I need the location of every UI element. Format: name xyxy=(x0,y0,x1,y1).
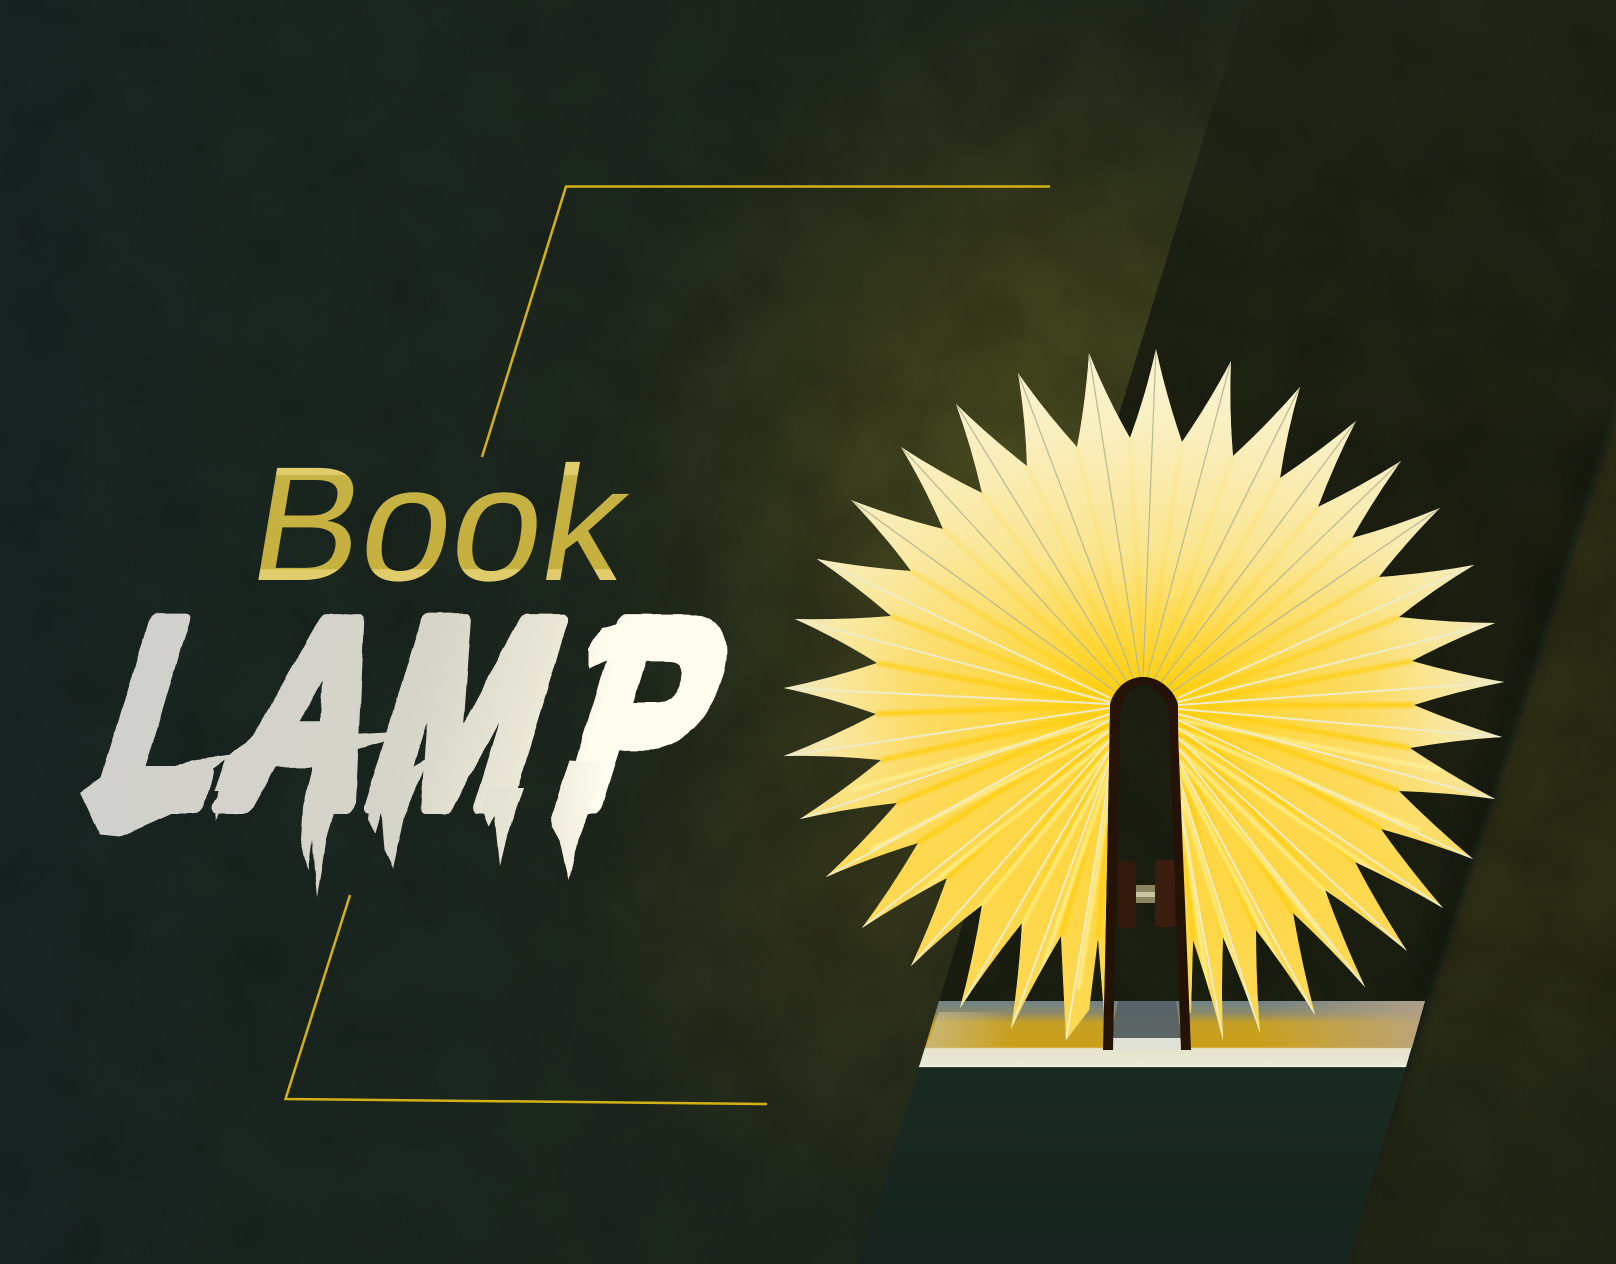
product: fanned paper pages of the lamp xyxy=(770,340,1520,1050)
tip fold lines, side and lower xyxy=(784,559,1504,1040)
centre-of-page highlights, lower half xyxy=(850,720,1440,990)
product: shelf with pool of light xyxy=(919,1001,1425,1067)
panel: olive diagonal wedge bottom right xyxy=(1320,420,1616,1264)
panel: dark diagonal band behind lamp xyxy=(919,0,1616,1067)
brush streaks and drips xyxy=(80,620,640,898)
title: LAMP brush lettering: LAMP xyxy=(69,565,757,862)
valley glows xyxy=(876,438,1414,940)
frame line: top gold bracket xyxy=(482,186,1050,457)
tip fold lines, upper half xyxy=(851,349,1440,692)
title: Book: Book xyxy=(239,432,642,615)
background: textured chalkboard xyxy=(620,20,1229,1170)
product: dark wooden arch stand xyxy=(1103,677,1191,1050)
panel: teal lower band under the shelf xyxy=(859,1067,1406,1264)
frame line: bottom gold bracket xyxy=(286,895,767,1104)
product: lamp axle and wooden knobs xyxy=(1118,860,1175,928)
